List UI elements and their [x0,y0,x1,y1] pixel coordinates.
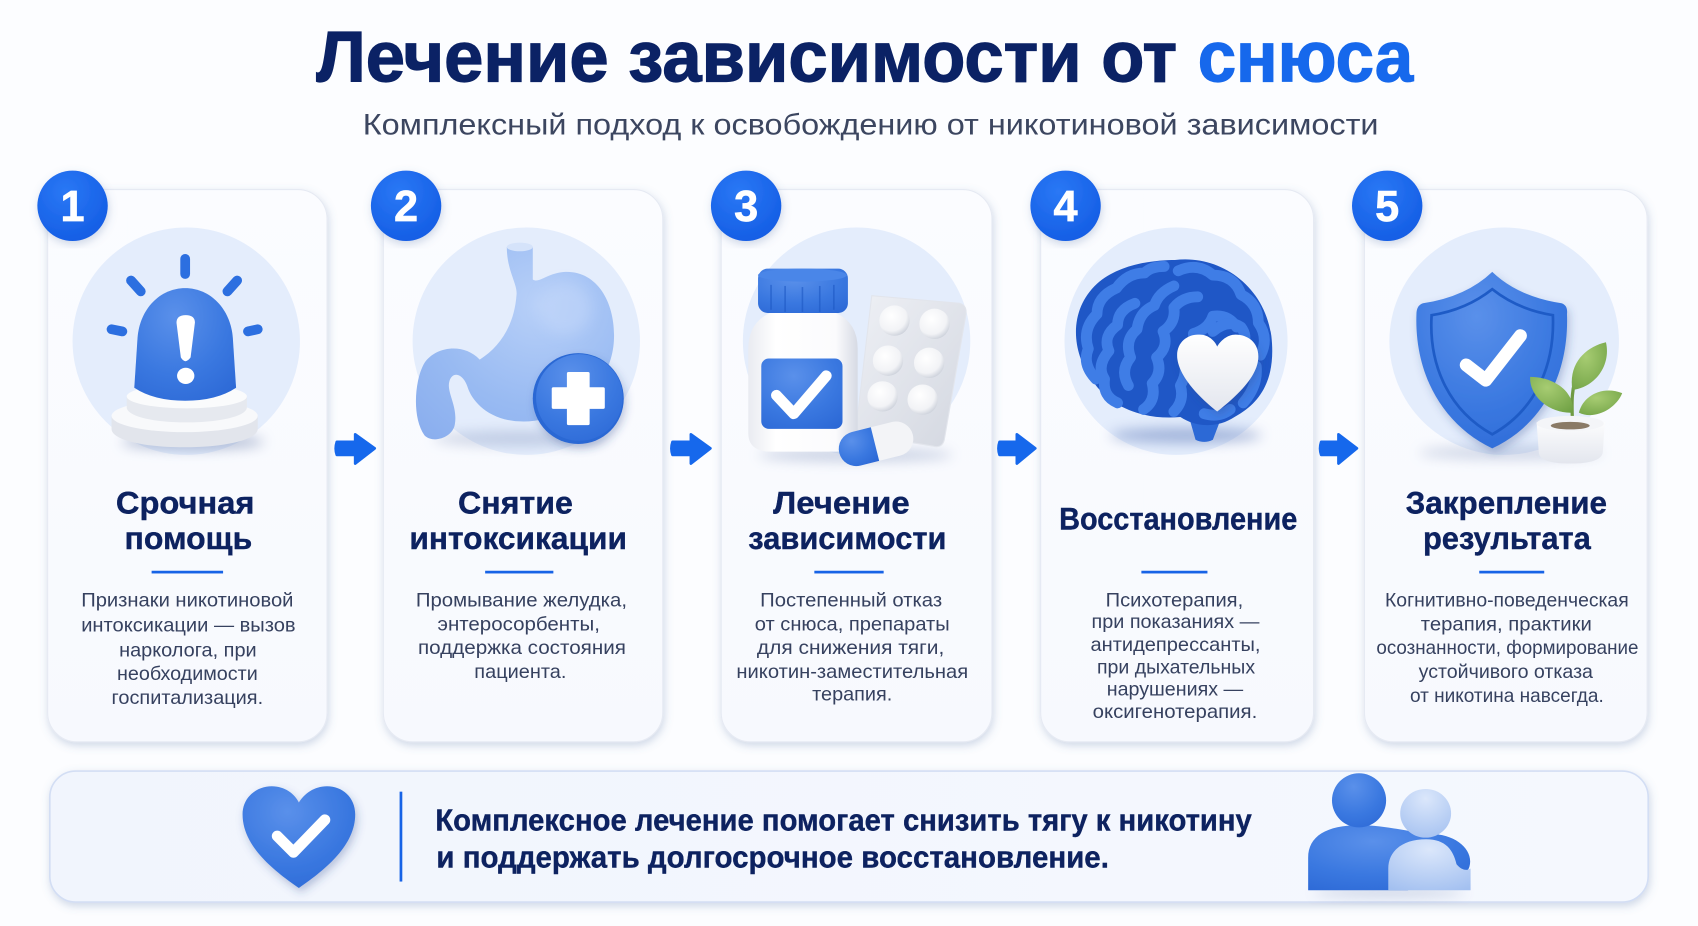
card 4 background [1041,190,1314,742]
divider 2 [485,571,553,573]
icon circle 5 [1389,227,1619,455]
body text 1: интоксикации — вызов [81,615,296,636]
icon circle 3 [743,227,970,455]
body text 4: при дыхательных [1097,658,1256,679]
icon: adult and child [1308,773,1471,897]
panel: step 4 recovery [1030,171,1314,742]
body text 4: при показаниях — [1092,612,1260,633]
number badge 5: 5 [1375,183,1399,231]
body text 4 [1090,590,1261,723]
icon: stomach with plus [416,243,624,446]
heading 1: помощь [125,521,252,556]
banner text [435,805,1252,874]
heading 5: результата [1423,521,1591,556]
body text 5 [1376,590,1638,707]
icon: alarm beacon [112,259,264,449]
arrow 2 to 3 [671,434,710,464]
divider 4 [1141,571,1207,573]
body text 3: от снюса, препараты [755,614,950,635]
heading 5: Закрепление [1406,485,1607,520]
heading 2 [409,485,627,556]
body text 3 [736,590,968,706]
divider 5 [1479,571,1544,573]
icon: heart with check [243,786,355,888]
panel: bottom banner [50,771,1648,902]
heading 3: зависимости [748,521,946,556]
body text 3: терапия. [812,685,892,706]
heading 5 [1406,485,1607,556]
body text 4: нарушениях — [1107,679,1244,700]
card 5 background [1364,190,1647,742]
body text 1 [81,590,296,709]
body text 1: Признаки никотиновой [81,590,293,611]
number badge 5 [1352,171,1422,241]
body text 1: нарколога, при [119,640,257,661]
heading 3 [748,485,946,556]
title: снюса [1198,17,1414,97]
body text 1: госпитализация. [112,688,263,709]
body text 2 [416,590,627,683]
body text 5: от никотина навсегда. [1410,686,1604,707]
heading 1: Срочная [116,485,254,520]
body text 3: Постепенный отказ [760,590,942,611]
card 1 background [48,190,327,742]
banner divider [400,792,402,882]
divider 1 [152,571,223,573]
heading 1 [116,485,254,556]
heading 2: интоксикации [409,521,627,556]
number badge 3: 3 [734,183,758,231]
heading 2: Снятие [458,485,573,520]
number badge 4 [1030,171,1101,241]
body text 4: Психотерапия, [1106,590,1243,611]
title: Лечение зависимости от [316,17,1177,97]
icon circle 1 [73,227,300,455]
body text 2: энтеросорбенты, [437,614,600,635]
body text 4: антидепрессанты, [1090,635,1261,656]
banner text: Комплексное лечение помогает снизить тягу к никотину [435,805,1252,838]
number badge 3 [711,171,781,241]
arrow 3 to 4 [998,434,1035,464]
number badge 1 [37,171,108,241]
subtitle: Комплексный подход к освобождению от никотиновой зависимости [363,109,1379,141]
card 2 background [383,190,663,742]
icon: pill bottle and blister [748,269,966,470]
body text 1: необходимости [117,664,258,685]
body text 2: поддержка состояния [418,638,626,659]
body text 3: для снижения тяги, [757,638,944,659]
banner text: и поддержать долгосрочное восстановление. [436,841,1109,874]
body text 5: устойчивого отказа [1419,662,1593,683]
card 3 background [721,190,992,742]
banner background [50,771,1648,902]
number badge 4: 4 [1054,183,1078,231]
number badge 2 [371,171,441,241]
body text 5: Когнитивно-поведенческая [1385,590,1629,611]
body text 2: пациента. [474,662,566,683]
panel: step 5 consolidation [1352,171,1647,742]
icon circle 4 [1064,227,1288,455]
divider 3 [814,571,884,573]
heading 3: Лечение [773,485,910,520]
body text 3: никотин-заместительная [736,662,968,683]
number badge 1: 1 [61,183,85,231]
icon: brain with heart [1076,259,1272,443]
body text 4: оксигенотерапия. [1093,702,1257,723]
arrow 1 to 2 [336,434,375,464]
heading 4: Восстановление [1059,502,1297,537]
panel: step 2 detox [371,171,663,742]
body text 5: терапия, практики [1421,614,1592,635]
number badge 2: 2 [394,183,418,231]
body text 5: осознанности, формирование [1376,638,1638,659]
body text 2: Промывание желудка, [416,590,627,611]
icon: shield with check and plant [1416,272,1622,464]
panel: step 3 addiction treatment [711,171,992,742]
icon circle 2 [413,227,640,455]
panel: step 1 urgent help [37,171,327,742]
arrow 4 to 5 [1320,434,1357,464]
